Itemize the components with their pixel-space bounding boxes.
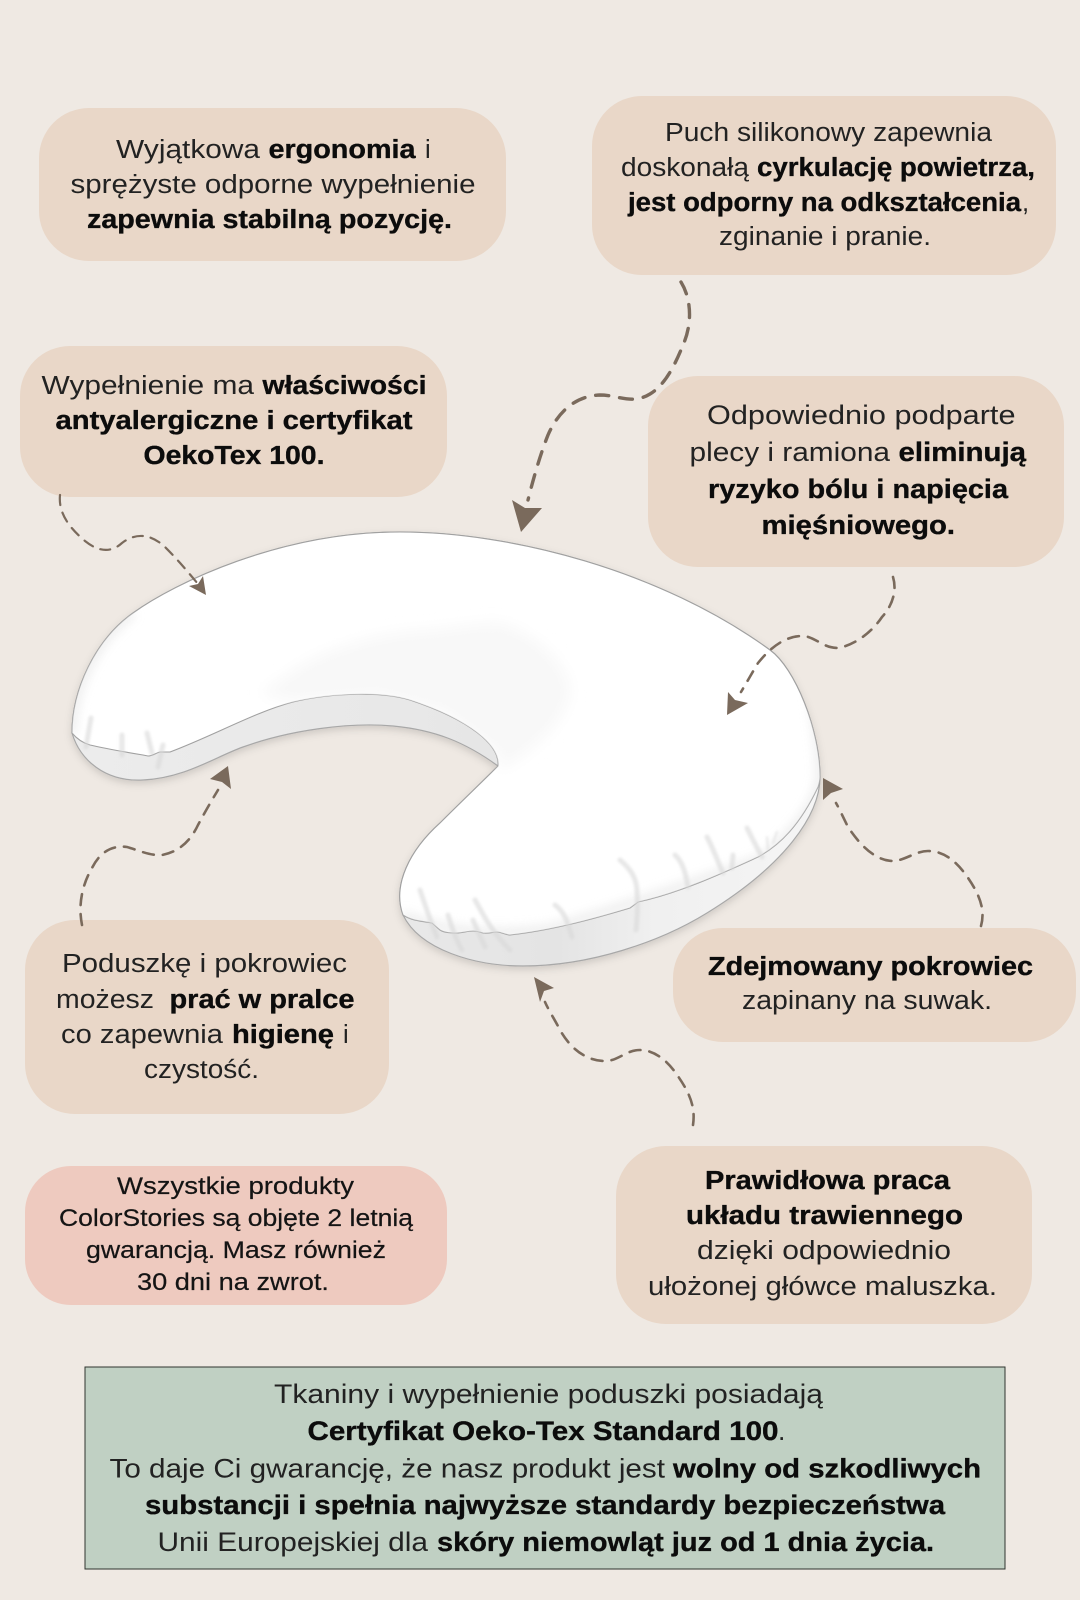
text: zdejmowany pokrowiec: zapinany na suwak.	[742, 987, 992, 1015]
text: ergonomia: sprężyste odporne wypełnienie	[70, 171, 476, 199]
text: puch silikonowy: ,	[1022, 189, 1029, 217]
text: puch silikonowy: Puch silikonowy zapewnia	[665, 119, 993, 147]
text: podparte plecy	[690, 400, 1026, 540]
text: podparte plecy: eliminują	[898, 437, 1026, 467]
text: certyfikat Oeko-Tex: skóry niemowląt juz od 1 dnia życia.	[437, 1527, 934, 1557]
text: puch silikonowy	[621, 119, 1035, 251]
arrow: zdejmowany pokrowiec to pillow	[823, 778, 983, 926]
illustration: white crescent pillow	[72, 532, 820, 966]
text: certyfikat Oeko-Tex: Unii Europejskiej dla	[158, 1527, 428, 1557]
panel: zdejmowany pokrowiec	[673, 928, 1076, 1042]
text: gwarancja	[59, 1173, 414, 1296]
pillow top surface	[72, 532, 820, 935]
text: podparte plecy: Odpowiednio podparte	[707, 400, 1016, 430]
panel: właściwości antyalergiczne	[20, 346, 447, 497]
text: podparte plecy: ryzyko bólu i napięcia	[708, 474, 1008, 504]
text: zdejmowany pokrowiec: Zdejmowany pokrowiec	[708, 953, 1033, 981]
text: gwarancja: Wszystkie produkty	[117, 1173, 354, 1200]
text: pranie w pralce: czystość.	[144, 1056, 259, 1084]
text: certyfikat Oeko-Tex	[110, 1379, 981, 1557]
text: układ trawienny: Prawidłowa praca	[705, 1167, 951, 1195]
text: ergonomia: ergonomia	[268, 136, 416, 164]
text: właściwości antyalergiczne: Wypełnienie ma	[42, 372, 255, 400]
text: certyfikat Oeko-Tex: Tkaniny i wypełnienie poduszki posiadają	[274, 1379, 823, 1409]
text: pranie w pralce: możesz	[56, 986, 154, 1014]
pillow soft inner shading	[72, 613, 820, 932]
text: certyfikat Oeko-Tex: .	[778, 1416, 785, 1446]
arrow: układ trawienny to pillow	[534, 977, 694, 1125]
pillow side wall	[72, 532, 820, 966]
text: właściwości antyalergiczne: OekoTex 100.	[144, 442, 324, 470]
text: ergonomia: Wyjątkowa	[116, 136, 261, 164]
text: pranie w pralce: Poduszkę i pokrowiec	[62, 950, 347, 978]
text: puch silikonowy: cyrkulację powietrza,	[757, 154, 1035, 182]
arrow: podparte plecy to pillow	[727, 577, 895, 715]
text: pranie w pralce	[56, 950, 354, 1084]
arrow: właściwości to pillow	[60, 495, 206, 595]
arrow: pranie w pralce to pillow	[80, 766, 231, 925]
panel: układ trawienny	[616, 1146, 1032, 1324]
text: podparte plecy: plecy i ramiona	[690, 437, 890, 467]
text: właściwości antyalergiczne	[42, 372, 426, 470]
panel: podparte plecy	[648, 376, 1064, 567]
text: certyfikat Oeko-Tex: Certyfikat Oeko-Tex Standard 100	[308, 1416, 778, 1446]
text: pranie w pralce: co zapewnia	[61, 1021, 224, 1049]
panel: puch silikonowy	[592, 96, 1056, 275]
text: ergonomia	[70, 136, 476, 234]
text: ergonomia: zapewnia stabilną pozycję.	[87, 206, 452, 234]
panel: pranie w pralce	[25, 920, 389, 1114]
panel: ergonomia	[39, 108, 506, 261]
text: gwarancja: ColorStories są objęte 2 letnią	[59, 1205, 414, 1232]
text: podparte plecy: mięśniowego.	[762, 510, 955, 540]
text: układ trawienny: ułożonej główce maluszka.	[648, 1273, 997, 1301]
text: układ trawienny: dzięki odpowiednio	[697, 1237, 951, 1265]
pillow wrinkles	[86, 718, 777, 950]
text: certyfikat Oeko-Tex: wolny od szkodliwych	[672, 1454, 981, 1484]
text: gwarancja: 30 dni na zwrot.	[137, 1269, 329, 1296]
text: gwarancja: gwarancją. Masz również	[86, 1237, 386, 1264]
text: pranie w pralce: prać w pralce	[170, 986, 354, 1014]
text: pranie w pralce: i	[343, 1021, 349, 1049]
text: właściwości antyalergiczne: antyalergiczne i certyfikat	[56, 407, 413, 435]
arrow: puch silikonowy to pillow	[512, 282, 690, 532]
text: ergonomia: i	[425, 136, 431, 164]
text: puch silikonowy: jest odporny na odkształcenia	[627, 189, 1022, 217]
text: układ trawienny	[648, 1167, 997, 1301]
text: puch silikonowy: doskonałą	[621, 154, 750, 182]
text: certyfikat Oeko-Tex: substancji i spełnia najwyższe standardy bezpieczeństwa	[145, 1490, 945, 1520]
text: pranie w pralce: higienę	[232, 1021, 334, 1049]
text: układ trawienny: układu trawiennego	[686, 1202, 963, 1230]
text: zdejmowany pokrowiec	[708, 953, 1033, 1015]
text: certyfikat Oeko-Tex: To daje Ci gwarancję, że nasz produkt jest	[110, 1454, 666, 1484]
panel: certyfikat Oeko-Tex	[85, 1367, 1005, 1569]
panel: gwarancja	[25, 1166, 447, 1305]
text: puch silikonowy: zginanie i pranie.	[719, 223, 931, 251]
text: właściwości antyalergiczne: właściwości	[261, 372, 426, 400]
